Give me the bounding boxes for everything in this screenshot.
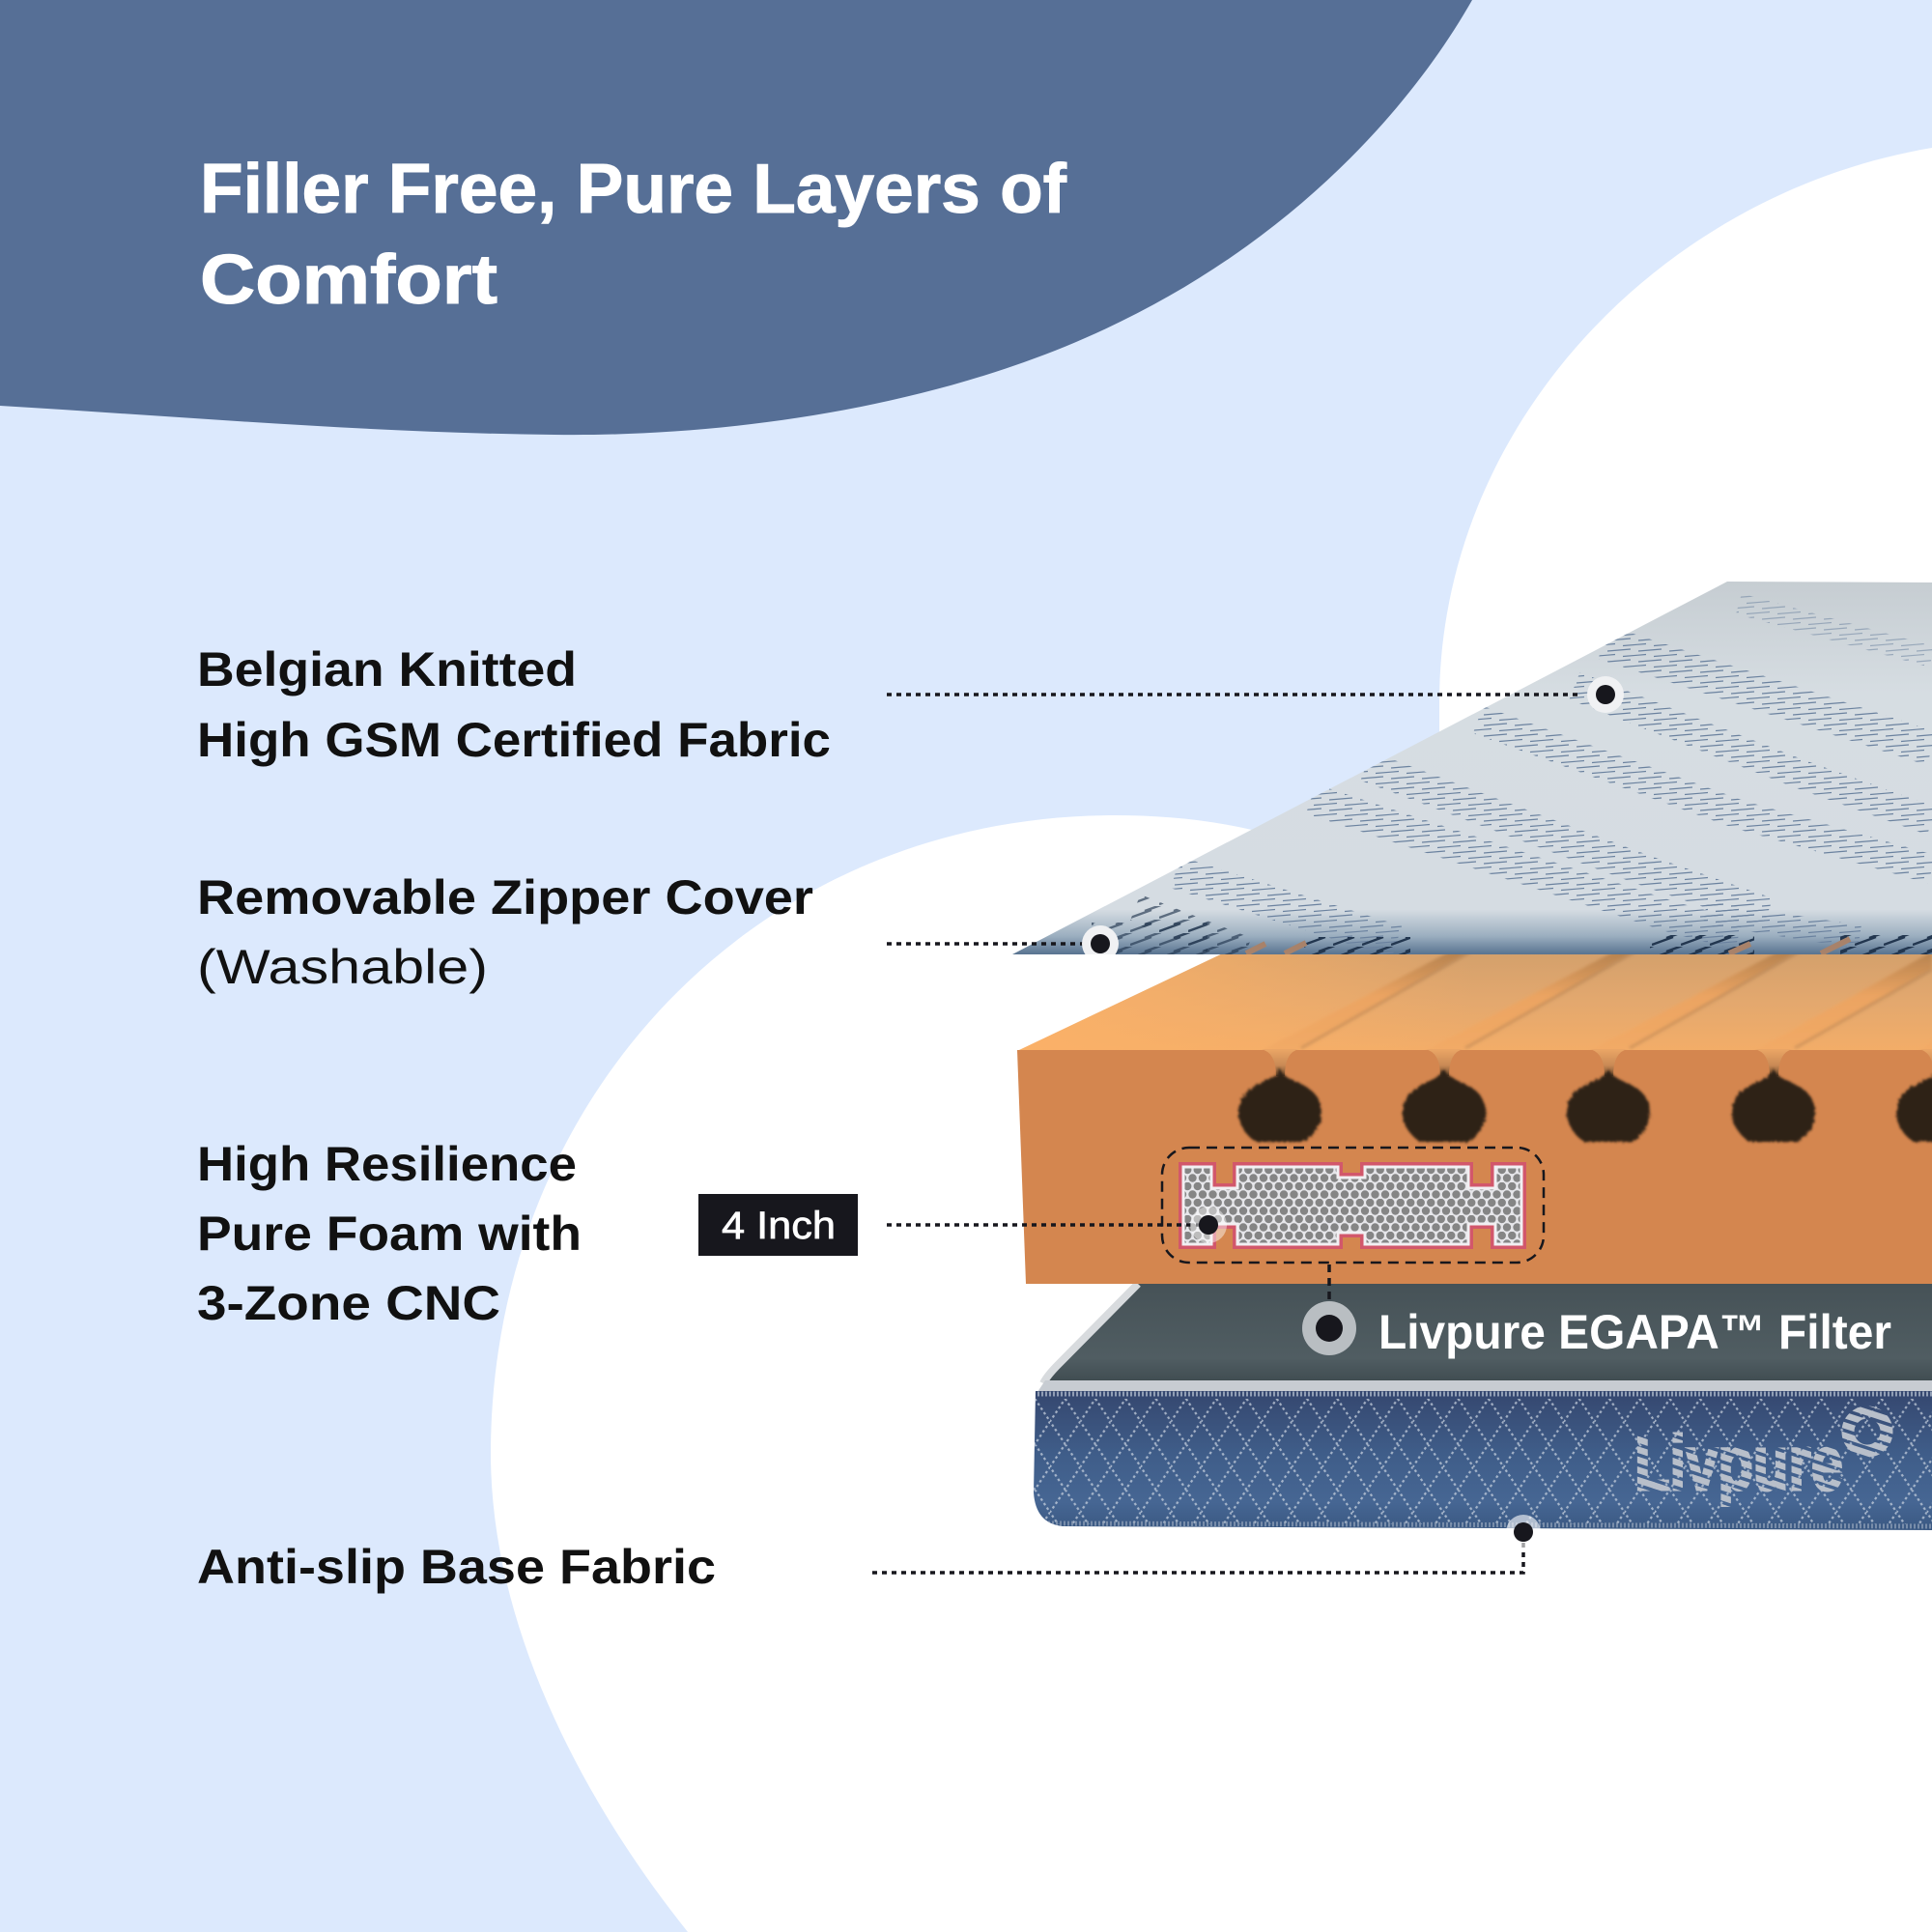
marker: base bbox=[1506, 1515, 1541, 1549]
label: base fabric: Anti-slip Base Fabric bbox=[197, 1540, 716, 1594]
label: foam bbox=[197, 1137, 582, 1330]
label: zipper cover: (Washable) bbox=[197, 940, 488, 994]
marker: foam bbox=[1190, 1207, 1227, 1243]
title: Filler Free, Pure Layers of bbox=[200, 151, 1067, 228]
base layer: dark inner cover bbox=[1043, 1284, 1932, 1383]
label: foam: 3-Zone CNC bbox=[197, 1276, 500, 1330]
foam air channels bbox=[1238, 1068, 1932, 1142]
header blob bbox=[0, 0, 1472, 435]
label: foam: Pure Foam with bbox=[197, 1207, 582, 1261]
label: zipper cover: Removable Zipper Cover bbox=[197, 870, 813, 924]
logo: Livpure: Livpure bbox=[1634, 1420, 1843, 1506]
title: Comfort bbox=[200, 242, 497, 319]
white blob: lower bbox=[491, 773, 1932, 1932]
title bbox=[200, 151, 1067, 319]
badge: 4 inch bbox=[698, 1194, 858, 1256]
groove slits bbox=[1261, 1049, 1932, 1076]
leader line: filter bbox=[1327, 1264, 1331, 1314]
label: fabric: Belgian Knitted bbox=[197, 642, 577, 696]
fabric woven stripes bbox=[1092, 604, 1932, 954]
filter: honeycomb EGAPA insert bbox=[1162, 1148, 1544, 1263]
top fabric layer bbox=[1012, 582, 1932, 954]
label: fabric: High GSM Certified Fabric bbox=[197, 713, 831, 767]
groove edge shadows bbox=[1301, 952, 1932, 1048]
marker: filter bbox=[1302, 1301, 1356, 1355]
marker: zipper bbox=[1082, 925, 1119, 954]
foam layer bbox=[1017, 952, 1932, 1284]
leader line: fabric bbox=[887, 693, 1577, 696]
filter label: Livpure EGAPA™ Filter bbox=[1378, 1305, 1891, 1359]
leader line: foam bbox=[887, 1223, 1201, 1227]
marker: fabric bbox=[1587, 676, 1624, 713]
badge: 4 inch: 4 Inch bbox=[722, 1205, 836, 1247]
label: fabric bbox=[197, 642, 831, 767]
leader line: base bbox=[872, 1538, 1523, 1573]
label: foam: High Resilience bbox=[197, 1137, 577, 1191]
groove strips on foam top bbox=[1263, 952, 1932, 1050]
label: zipper cover bbox=[197, 870, 813, 994]
white blob: top right bbox=[1439, 148, 1932, 966]
mattress base: quilted blue fabric bbox=[1024, 1380, 1932, 1530]
leader line: zipper bbox=[887, 942, 1084, 946]
